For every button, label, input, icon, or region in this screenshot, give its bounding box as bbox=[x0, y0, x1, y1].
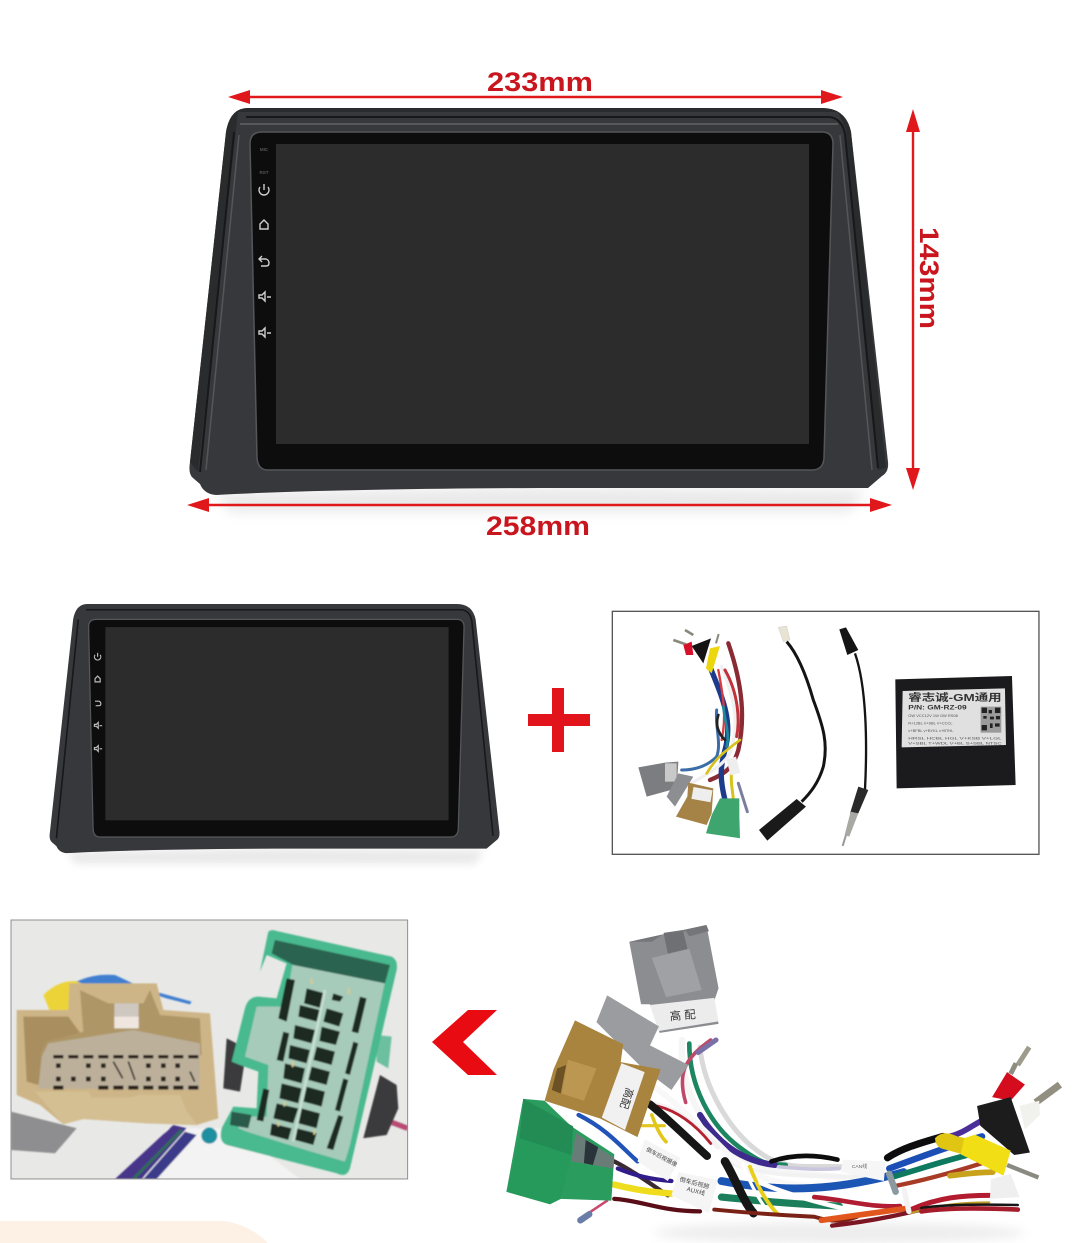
wire labels bbox=[637, 1139, 886, 1213]
dimension: bottom width 258mm: 258mm bbox=[486, 511, 590, 541]
CAN bus decoder box: v+BFBL v+BYKL v+BTHL bbox=[908, 728, 954, 733]
small grey connector bbox=[638, 762, 678, 797]
tan connector bbox=[17, 983, 218, 1125]
wire labels: CAN线 bbox=[852, 1163, 867, 1170]
CAN bus decoder box: P/N: GM-RZ-09 bbox=[908, 704, 967, 711]
radio screen bbox=[276, 144, 809, 444]
CAN bus decoder box: HRSL HCBL HGL V+KSB V+LGL bbox=[908, 735, 1003, 740]
radio frame bbox=[189, 108, 888, 495]
icon: back bbox=[259, 256, 269, 266]
icon: power bbox=[259, 184, 269, 195]
connector label: 高 配 bbox=[669, 1007, 697, 1023]
antenna plug cable bbox=[839, 627, 868, 846]
dimension: bottom width 258mm bbox=[187, 498, 892, 541]
peach corner shape bbox=[0, 1221, 268, 1243]
connector close-up photo bbox=[11, 920, 408, 1179]
icon: home bbox=[260, 220, 268, 229]
icon: volume down bbox=[259, 328, 271, 337]
small wiring harness bbox=[638, 630, 747, 838]
box label bbox=[902, 688, 1006, 747]
icon: volume up bbox=[259, 292, 271, 301]
photo border bbox=[11, 920, 408, 1179]
dimension: height 143mm bbox=[906, 109, 944, 490]
large radio unit bbox=[189, 108, 888, 512]
wire bundles bbox=[579, 1040, 1018, 1226]
green connector bbox=[506, 1099, 614, 1204]
dimension: top width 233mm: 233mm bbox=[487, 67, 593, 97]
brown connector label: 高配 bbox=[617, 1086, 636, 1111]
dimension: height 143mm: 143mm bbox=[914, 227, 944, 329]
RCA plugs bbox=[935, 1047, 1060, 1199]
wire labels: 倒车后视频 bbox=[679, 1175, 710, 1191]
yellow RCA plug bbox=[935, 1133, 966, 1154]
small radio unit bbox=[50, 604, 500, 864]
tan connector pins bbox=[53, 1055, 198, 1090]
side buttons bbox=[259, 147, 271, 337]
dimension: top width 233mm bbox=[228, 67, 843, 104]
small labels bbox=[726, 757, 740, 775]
small brown connector bbox=[676, 783, 713, 825]
radio bezel bbox=[250, 132, 833, 470]
grey middle connector bbox=[596, 995, 689, 1090]
small green connector bbox=[706, 798, 740, 838]
side buttons: RST bbox=[260, 170, 269, 175]
large wiring harness bbox=[506, 925, 1060, 1243]
side buttons: MIC bbox=[260, 147, 269, 152]
panel: included accessories bbox=[612, 611, 1039, 854]
green connector bbox=[221, 930, 397, 1175]
QR code bbox=[981, 707, 1001, 733]
wire labels: 倒车后视摄像 bbox=[645, 1145, 679, 1169]
wire labels: AUX线 bbox=[686, 1185, 706, 1197]
icon: red plus bbox=[528, 688, 590, 752]
icon: red left chevron bbox=[432, 1010, 497, 1075]
CAN bus decoder box: R+12BL V+0BL V+CCCL bbox=[908, 721, 953, 726]
brown connector bbox=[545, 1020, 661, 1137]
small RCA plugs bbox=[673, 630, 693, 644]
green connector interior bbox=[238, 964, 386, 1162]
CAN bus decoder box bbox=[895, 676, 1016, 788]
grey upper connector bbox=[629, 925, 719, 1033]
green connector blades bbox=[257, 978, 367, 1150]
CAN bus decoder box: V+SBL T+WDL V+BL S+SBL NTSC bbox=[908, 742, 1002, 746]
antenna adapter cable bbox=[759, 626, 825, 841]
CAN bus decoder box: GW VCC12V 1W GW RS08 bbox=[908, 713, 959, 718]
CAN bus decoder box: 睿志诚-GM通用 bbox=[908, 691, 1002, 704]
